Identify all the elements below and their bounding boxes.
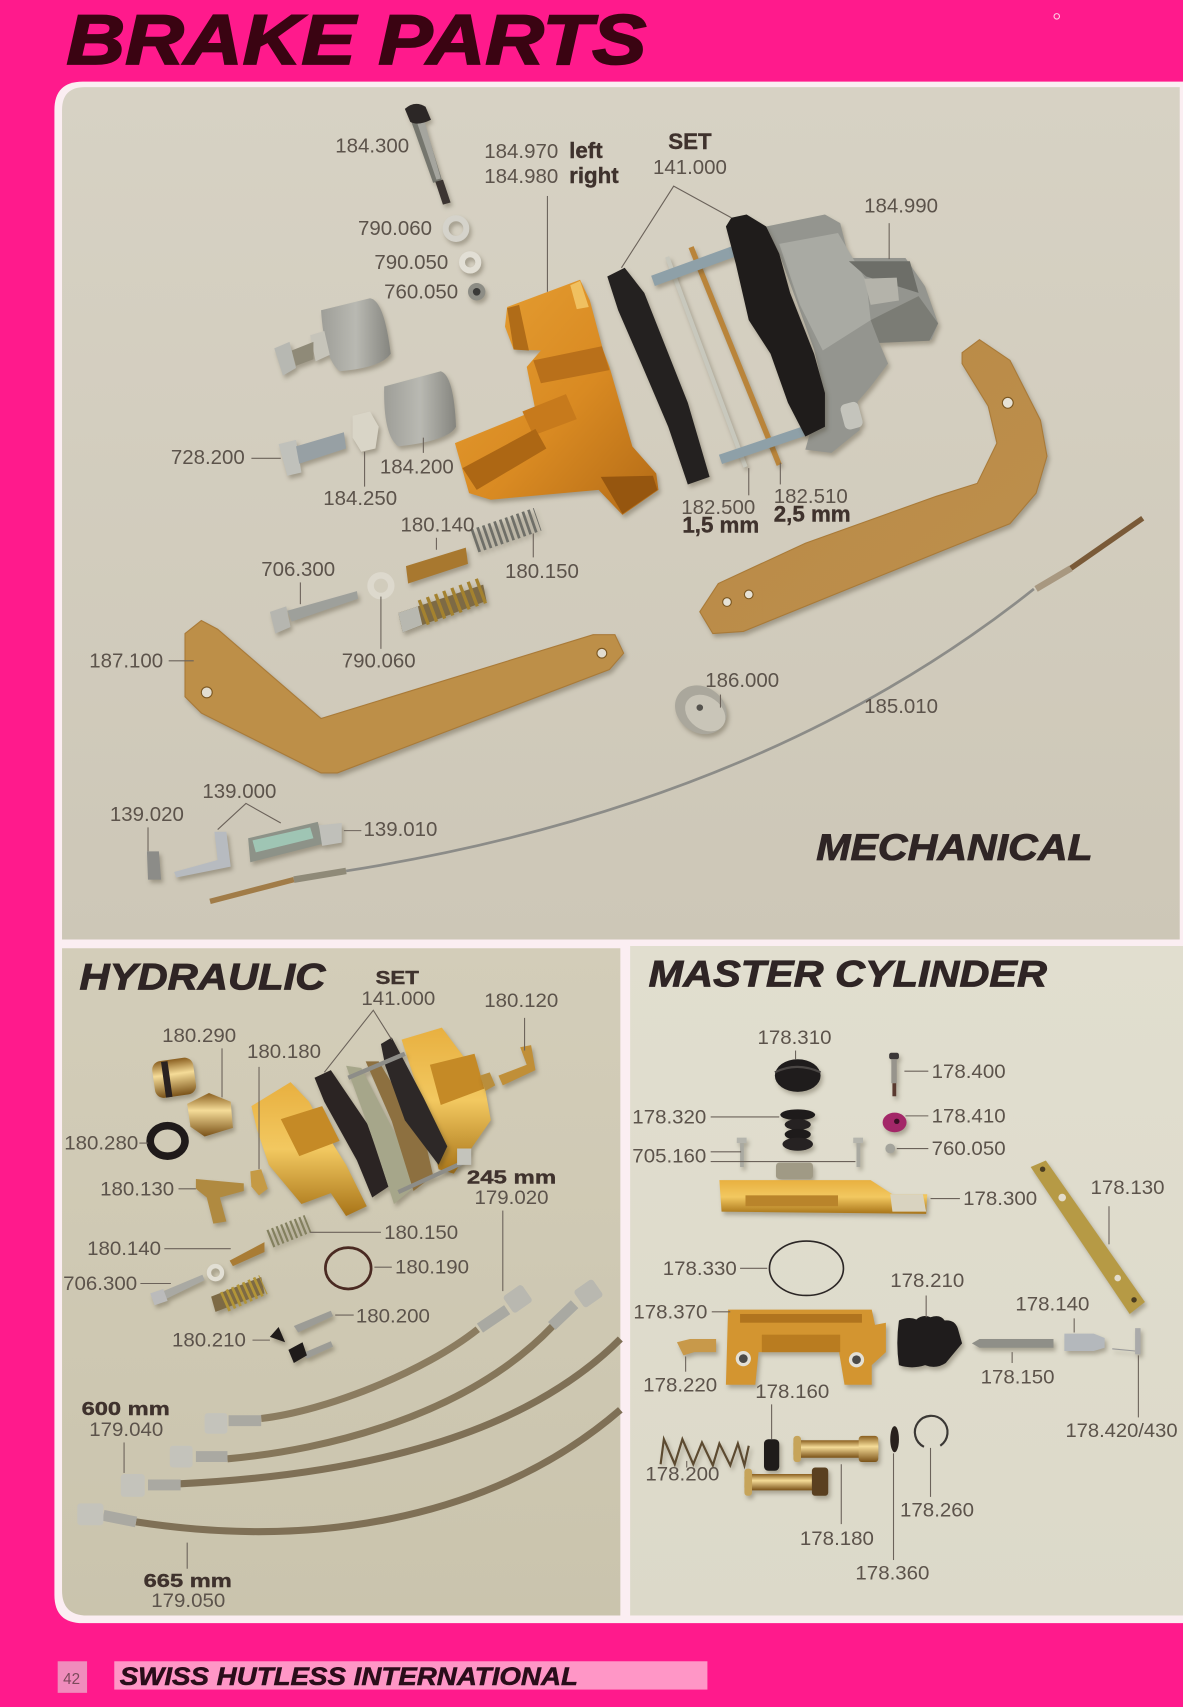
part: bolt 178.400 (889, 1053, 899, 1096)
label: 139.010: 139.010 (363, 818, 437, 841)
label: 184.970 left: left (569, 138, 603, 163)
part: clevis 178.140 (1064, 1334, 1105, 1351)
heading: mechanical: MECHANICAL (816, 827, 1093, 868)
label: 178.360: 178.360 (855, 1564, 929, 1585)
label: 728.200 (171, 446, 281, 469)
label: 180.120 (484, 991, 558, 1051)
label: 182.500 1,5 mm: 1,5 mm (682, 512, 759, 537)
part: cable clevis 139.000 (147, 822, 342, 880)
label: 178.130: 178.130 (1090, 1178, 1164, 1199)
label: 178.300 (931, 1189, 1037, 1210)
label: 706.300 (261, 558, 335, 604)
label: 178.420/430: 178.420/430 (1065, 1421, 1178, 1442)
label: 706.300 (63, 1274, 171, 1295)
label: 178.220 (643, 1356, 717, 1396)
panel: mechanical (62, 87, 1180, 940)
label: 706.300: 706.300 (63, 1274, 137, 1295)
part: pin 178.420/430 (1112, 1328, 1141, 1354)
label: 178.360 (855, 1453, 929, 1585)
label: 178.220: 178.220 (643, 1375, 717, 1396)
part: hydraulic caliper gold halves (251, 1028, 491, 1216)
label: 665 mm 179.050: 665 mm (144, 1570, 232, 1591)
part: cylinder with bolt (274, 298, 391, 376)
label: 178.200: 178.200 (645, 1465, 719, 1486)
label: 139.000 (202, 780, 281, 830)
label: 180.150: 180.150 (384, 1223, 458, 1244)
part: spring and bushing (230, 1224, 308, 1266)
label: 180.150 (505, 533, 579, 583)
label: 178.260 (900, 1448, 974, 1521)
label: 182.510 2,5 mm: 182.510 (774, 485, 848, 508)
label: 187.100: 187.100 (89, 649, 163, 672)
part: seal 178.160 (764, 1439, 779, 1471)
label: 178.150: 178.150 (981, 1368, 1055, 1389)
part: silver lever caliper (766, 214, 938, 453)
page number box (58, 1661, 87, 1693)
label: 184.300: 184.300 (335, 134, 409, 157)
part: braided hoses (77, 1278, 620, 1532)
label: set 141.000: 141.000 (653, 156, 727, 179)
part: brake pad right (726, 214, 825, 437)
label: 182.500 1,5 mm (681, 468, 759, 537)
label: 180.210: 180.210 (172, 1331, 246, 1352)
label: 665 mm 179.050: 179.050 (151, 1591, 225, 1612)
label: 790.060 lower: 790.060 (342, 649, 416, 672)
label: set 141.000: 141.000 (361, 989, 435, 1010)
part: pushrod 178.150 (972, 1339, 1053, 1348)
part: spring 178.200 (661, 1439, 749, 1465)
label: 178.400: 178.400 (932, 1062, 1006, 1083)
label: 600 mm 179.040 (82, 1398, 170, 1473)
part: o-ring 178.360 (890, 1426, 899, 1452)
label: 184.990: 184.990 (864, 194, 938, 217)
part: right lever arm (700, 340, 1047, 634)
label: set 141.000 (324, 967, 435, 1072)
part: nut 760.050 (885, 1144, 895, 1153)
part: cylinder 184.200 (279, 371, 456, 476)
label: 184.980 right: right (569, 163, 619, 188)
label: 665 mm 179.050 (144, 1543, 232, 1612)
label: 178.160 (755, 1382, 829, 1439)
label: 178.130 (1090, 1178, 1164, 1244)
label: 600 mm 179.040: 179.040 (89, 1420, 163, 1441)
label: 178.400 (904, 1062, 1006, 1083)
label: 184.200: 184.200 (380, 456, 454, 479)
label: 184.990 (864, 194, 938, 259)
label: 790.050: 790.050 (374, 251, 448, 274)
label: 706.300: 706.300 (261, 558, 335, 581)
label: 185.010: 185.010 (864, 695, 938, 718)
label: 184.970 left: 184.970 (484, 140, 558, 163)
label: 178.310: 178.310 (757, 1028, 831, 1049)
part: threaded studs (653, 251, 808, 459)
label: 705.160: 705.160 (632, 1147, 706, 1168)
label: 186.000 (705, 669, 779, 708)
label: 184.200 (380, 438, 454, 479)
part: fitting 178.220 (677, 1339, 716, 1355)
label: 184.250 (323, 452, 397, 510)
part: o-ring 178.330 (769, 1241, 843, 1295)
label: 178.420/430 (1065, 1355, 1178, 1442)
label: 178.300: 178.300 (963, 1189, 1037, 1210)
label: 184.980 right: 184.980 (484, 165, 558, 188)
label: 139.020 (110, 803, 184, 851)
label: set 141.000: SET (668, 129, 712, 154)
label: 182.510 2,5 mm: 2,5 mm (774, 501, 851, 526)
heading: master cylinder: MASTER CYLINDER (649, 953, 1047, 994)
label: 180.180: 180.180 (247, 1042, 321, 1063)
footer bar: SWISS HUTLESS INTERNATIONAL (120, 1663, 578, 1691)
label: 178.330 (663, 1259, 767, 1280)
label: 180.140: 180.140 (87, 1239, 161, 1260)
label: 760.050: 760.050 (932, 1139, 1006, 1160)
part: left lever arm 187.100 (185, 621, 624, 773)
label: 178.140: 178.140 (1015, 1295, 1089, 1316)
label: 178.180: 178.180 (800, 1529, 874, 1550)
label: 178.320: 178.320 (632, 1107, 706, 1128)
label: 180.290: 180.290 (162, 1026, 236, 1047)
part: circlip 178.260 (915, 1416, 948, 1447)
label: 180.140: 180.140 (401, 513, 474, 536)
part: shoulder bolt 184.300 (405, 104, 451, 205)
part: washer 178.410 (883, 1113, 907, 1132)
label: 180.120: 180.120 (484, 991, 558, 1012)
part: shim plates (667, 247, 779, 467)
label: 186.000: 186.000 (705, 669, 779, 692)
part: screws 705.160 (737, 1138, 863, 1167)
part: 180.120 elbow fitting (480, 1045, 535, 1091)
label: 178.310 (757, 1028, 831, 1059)
label: 178.150 (981, 1352, 1055, 1389)
label: 178.370: 178.370 (633, 1302, 707, 1323)
part: bushing 180.140 (406, 548, 468, 584)
label: 180.190: 180.190 (395, 1258, 469, 1279)
label: 184.980 right (484, 163, 619, 292)
label: 139.020: 139.020 (110, 803, 184, 826)
part: hydraulic pads and shims (315, 1037, 471, 1204)
part: reservoir 178.300 (719, 1163, 927, 1214)
label: set 141.000: SET (375, 967, 420, 988)
label: 182.500 1,5 mm: 182.500 (681, 496, 755, 519)
part: brake pad left (607, 268, 710, 484)
label: 728.200: 728.200 (171, 446, 245, 469)
label: 790.060 lower (342, 597, 416, 672)
part: bellows 178.320 (780, 1109, 815, 1151)
part: cylinder body 178.370 (726, 1310, 886, 1385)
part: spring 180.150 (475, 519, 538, 541)
part: pistons 180.290 (151, 1057, 233, 1137)
label: 178.410 (905, 1106, 1006, 1127)
label: 178.160: 178.160 (755, 1382, 829, 1403)
label: 184.250: 184.250 (323, 487, 397, 510)
label: 178.210: 178.210 (890, 1271, 964, 1292)
label: 245 mm 179.020: 179.020 (475, 1188, 549, 1209)
label: 705.160 (632, 1147, 855, 1168)
page number box: 42 (63, 1671, 80, 1688)
label: 180.280: 180.280 (64, 1134, 138, 1155)
part: washers and nut (446, 218, 485, 300)
label: 180.150: 180.150 (505, 560, 579, 583)
part: gold caliper (455, 280, 658, 515)
label: set 141.000 (621, 129, 731, 268)
label: 182.510 2,5 mm (774, 463, 851, 526)
title: BRAKE PARTS (66, 0, 646, 79)
part: piston 178.180 (793, 1436, 878, 1462)
label: 139.000: 139.000 (202, 780, 276, 803)
small registration mark (1054, 14, 1059, 19)
label: 178.260: 178.260 (900, 1500, 974, 1521)
part: t-fitting 180.130 (196, 1179, 244, 1224)
part: boot 178.210 (897, 1316, 962, 1367)
label: 180.200: 180.200 (356, 1307, 430, 1328)
label: 760.050 (897, 1139, 1006, 1160)
part: brake cable 185.010 (210, 518, 1143, 901)
label: 180.180 (247, 1042, 321, 1169)
label: 245 mm 179.020: 245 mm (467, 1166, 556, 1187)
footer bar (114, 1661, 707, 1691)
label: 180.140 (401, 513, 474, 550)
label: 790.060: 790.060 (358, 217, 432, 240)
panel: master cylinder (630, 946, 1183, 1616)
part: washer 790.060 (371, 575, 391, 596)
label: 180.290 (162, 1026, 236, 1097)
part: bleed valves and caps (270, 1311, 333, 1363)
label: 180.130: 180.130 (100, 1179, 174, 1200)
label: 178.140 (1015, 1295, 1089, 1333)
part: o-ring 180.190 (325, 1248, 371, 1289)
part: piston assembled (744, 1467, 828, 1496)
heading: hydraulic: HYDRAULIC (79, 957, 327, 998)
label: 600 mm 179.040: 600 mm (82, 1398, 170, 1419)
part: bolt 706.300 (270, 591, 358, 634)
part: cap 178.310 (775, 1059, 821, 1092)
label: 178.210 (890, 1271, 964, 1317)
label: 178.330: 178.330 (663, 1259, 737, 1280)
part: small fitting 180.180 (250, 1169, 268, 1195)
label: 178.410: 178.410 (932, 1106, 1006, 1127)
label: 178.180 (800, 1464, 874, 1550)
part: bolt, washer and piston (150, 1266, 264, 1312)
panel: hydraulic (62, 948, 620, 1616)
part: o-ring 180.280 (150, 1126, 185, 1156)
label: 245 mm 179.020 (467, 1166, 556, 1291)
label: 760.050: 760.050 (384, 280, 458, 303)
part: strap 178.130 (1031, 1160, 1145, 1314)
part: pulley 186.000 (665, 675, 736, 744)
part: sprung piston (398, 585, 486, 633)
